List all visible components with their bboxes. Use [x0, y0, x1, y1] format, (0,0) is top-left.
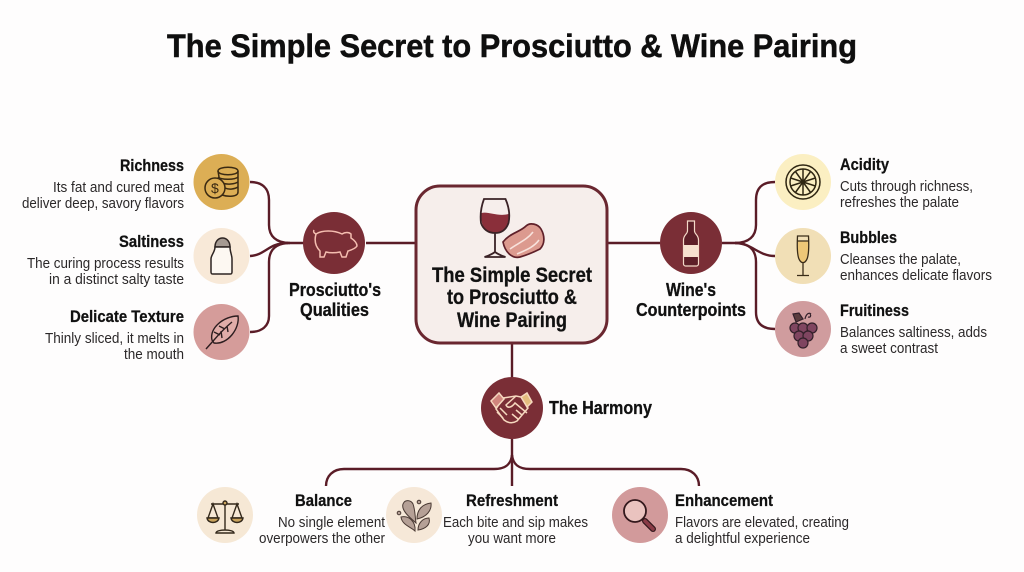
heading: the harmony: The Harmony [549, 398, 652, 418]
icon: coins [205, 167, 238, 198]
text: delicate texture: Thinly sliced, it melts in [45, 331, 184, 347]
text: bubbles [840, 228, 992, 284]
text: balance: Balance [295, 491, 352, 510]
text: refreshment [443, 491, 588, 547]
text: acidity: refreshes the palate [840, 195, 959, 211]
icon: handshake [491, 393, 532, 423]
item: acidity [775, 154, 973, 211]
heading: prosciutto's qualities: Prosciutto's [289, 280, 381, 300]
icon: splash [397, 500, 431, 531]
icon: wine glass and prosciutto [481, 199, 544, 257]
heading: prosciutto's qualities [289, 280, 381, 320]
text: richness: Richness [120, 156, 184, 175]
text: enhancement: Enhancement [675, 491, 773, 510]
item: saltiness [27, 228, 250, 288]
item: refreshment [386, 487, 588, 547]
text: fruitiness [840, 301, 987, 357]
text: refreshment: Each bite and sip makes [443, 515, 588, 531]
text: delicate texture: the mouth [124, 347, 184, 363]
text: richness: Its fat and cured meat [53, 180, 184, 196]
item: richness [22, 154, 250, 212]
central panel [416, 186, 607, 343]
item: balance [197, 487, 385, 547]
text: balance [259, 491, 385, 547]
heading: prosciutto's qualities: Qualities [300, 300, 369, 320]
text: enhancement: a delightful experience [675, 531, 810, 547]
text: fruitiness: Fruitiness [840, 301, 909, 320]
item: fruitiness [775, 301, 987, 357]
text: balance: No single element [278, 515, 385, 531]
text: acidity [840, 155, 973, 211]
icon: salt shaker [211, 238, 232, 274]
text: saltiness: The curing process results [27, 256, 184, 272]
heading: wine's counterpoints: Wine's [666, 280, 716, 300]
icon: champagne flute [797, 236, 809, 276]
panel: the harmony hub [481, 377, 652, 439]
text: delicate texture: Delicate Texture [70, 307, 184, 326]
center heading [432, 264, 592, 332]
text: delicate texture [45, 307, 184, 363]
text: acidity: Cuts through richness, [840, 179, 973, 195]
text: balance: overpowers the other [259, 531, 385, 547]
text: fruitiness: Balances saltiness, adds [840, 325, 987, 341]
icon: grapes [790, 313, 817, 348]
text: bubbles: enhances delicate flavors [840, 268, 992, 284]
icon: feather [206, 316, 238, 349]
text: bubbles: Bubbles [840, 228, 897, 247]
item: bubbles [775, 228, 992, 284]
text: richness: deliver deep, savory flavors [22, 196, 184, 212]
text: richness [22, 156, 184, 212]
text: acidity: Acidity [840, 155, 889, 174]
heading: wine's counterpoints [636, 280, 746, 320]
icon: citrus slice [786, 165, 820, 199]
text: bubbles: Cleanses the palate, [840, 252, 961, 268]
panel: prosciutto's qualities hub [289, 212, 381, 320]
text: saltiness: Saltiness [119, 232, 184, 251]
text: saltiness: in a distinct salty taste [49, 272, 184, 288]
center heading: The Simple Secret [432, 264, 592, 287]
icon: pig [314, 230, 357, 257]
icon: wine bottle [684, 221, 698, 266]
connector lines [250, 182, 775, 486]
text: saltiness [27, 232, 184, 288]
text: enhancement: Flavors are elevated, creating [675, 515, 849, 531]
icon: coins: $ [211, 180, 219, 196]
title: The Simple Secret to Prosciutto & Wine Pairing [167, 28, 857, 64]
center heading: to Prosciutto & [447, 286, 577, 309]
text: refreshment: you want more [468, 531, 556, 547]
text: fruitiness: a sweet contrast [840, 341, 938, 357]
text: enhancement [675, 491, 849, 547]
item: delicate texture [45, 304, 250, 363]
icon: scales [207, 501, 243, 533]
item: enhancement [612, 487, 849, 547]
panel: wine's counterpoints hub [636, 212, 746, 320]
icon: magnifying glass [624, 500, 653, 529]
text: refreshment: Refreshment [466, 491, 558, 510]
heading: wine's counterpoints: Counterpoints [636, 300, 746, 320]
center heading: Wine Pairing [457, 309, 567, 332]
